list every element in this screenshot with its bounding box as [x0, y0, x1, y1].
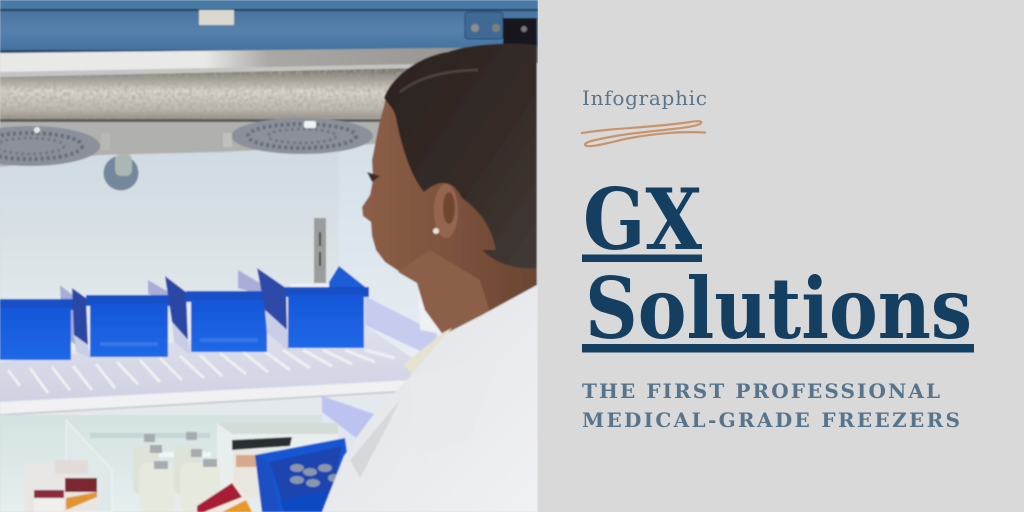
- subtitle: [582, 379, 960, 432]
- earring: [433, 228, 439, 234]
- blue storage bin 2: [72, 280, 172, 358]
- blue storage bin 1: [0, 285, 76, 360]
- left fan: [0, 126, 100, 166]
- drain port and hose: [104, 154, 138, 190]
- inner ear: [443, 192, 455, 224]
- freezer side wall: [339, 140, 449, 360]
- eyelashes: [367, 172, 380, 182]
- face and neck: [362, 98, 537, 336]
- textured foil duct: [0, 68, 420, 120]
- wall rail: [314, 218, 326, 283]
- hair: [384, 44, 537, 268]
- upper shelf: [0, 322, 412, 416]
- panel: freezer photo illustration: [0, 0, 538, 512]
- medicine box stack: [217, 423, 338, 497]
- subtitle: MEDICAL-GRADE FREEZERS: [582, 408, 960, 432]
- right fan: [231, 118, 373, 154]
- hair highlights: [400, 70, 478, 92]
- title: Solutions: Solutions: [585, 259, 972, 358]
- wall edge panel behind the woman: [418, 282, 446, 335]
- shelf side flange: [365, 296, 437, 358]
- subtitle: THE FIRST PROFESSIONAL: [582, 379, 940, 403]
- label: Infographic: Infographic: [582, 86, 707, 110]
- lower shelf compartment: [0, 396, 374, 512]
- blue freezer top frame: [0, 0, 538, 56]
- tilted medicine box: [195, 481, 255, 512]
- neck highlight: [398, 250, 490, 336]
- blue storage bin 3: [165, 270, 272, 355]
- title: GX: GX: [583, 170, 703, 269]
- lab coat: [322, 285, 537, 512]
- fan housing: [0, 118, 395, 167]
- icon: hand-drawn underline scribble: [582, 121, 705, 146]
- ear: [434, 184, 458, 238]
- panel: right title panel: [538, 0, 1024, 512]
- blue bin with vials: [255, 438, 347, 512]
- freezer back wall: [0, 150, 340, 350]
- small red medicine boxes: [24, 460, 97, 512]
- silver trim strip: [0, 47, 538, 77]
- blue storage bin 4: [257, 266, 369, 351]
- glass vials: [133, 432, 220, 512]
- woman in lab coat: [322, 44, 537, 512]
- collar: [403, 328, 452, 375]
